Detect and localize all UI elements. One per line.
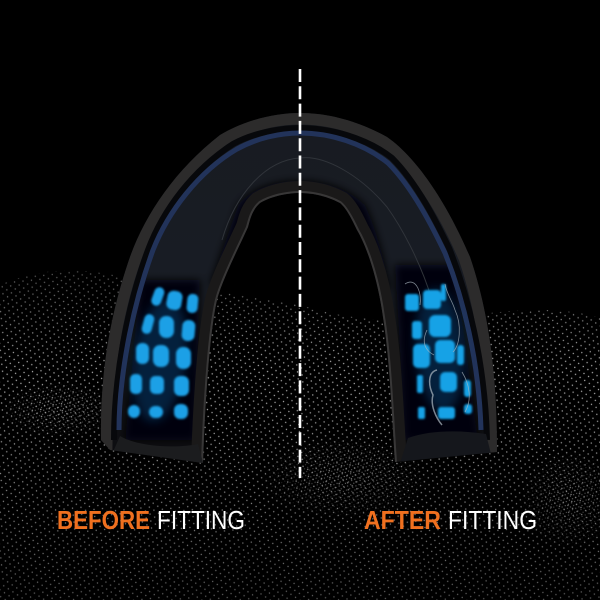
label: before fitting: BEFORE <box>57 505 150 535</box>
blue channel <box>114 128 487 440</box>
inner ridge <box>222 158 432 300</box>
inner edge band <box>203 193 395 463</box>
blue glow <box>126 286 468 425</box>
label: after fitting: FITTING <box>448 505 537 535</box>
dashed divider line <box>299 69 301 478</box>
label: after fitting <box>364 505 537 535</box>
dotted wave background <box>0 260 600 600</box>
mouthguard <box>101 113 497 470</box>
label: after fitting: AFTER <box>364 505 441 535</box>
dark zones behind squares <box>125 181 478 440</box>
after fitting blue squares <box>405 282 472 425</box>
guard details <box>101 113 497 470</box>
guard body <box>101 113 497 463</box>
label: before fitting: FITTING <box>157 505 245 535</box>
bottom lip <box>114 436 203 463</box>
before fitting blue squares <box>128 286 199 419</box>
label: before fitting <box>57 505 245 535</box>
inner edge <box>203 193 395 463</box>
bubble highlights <box>405 282 469 425</box>
outer rim <box>101 113 497 470</box>
